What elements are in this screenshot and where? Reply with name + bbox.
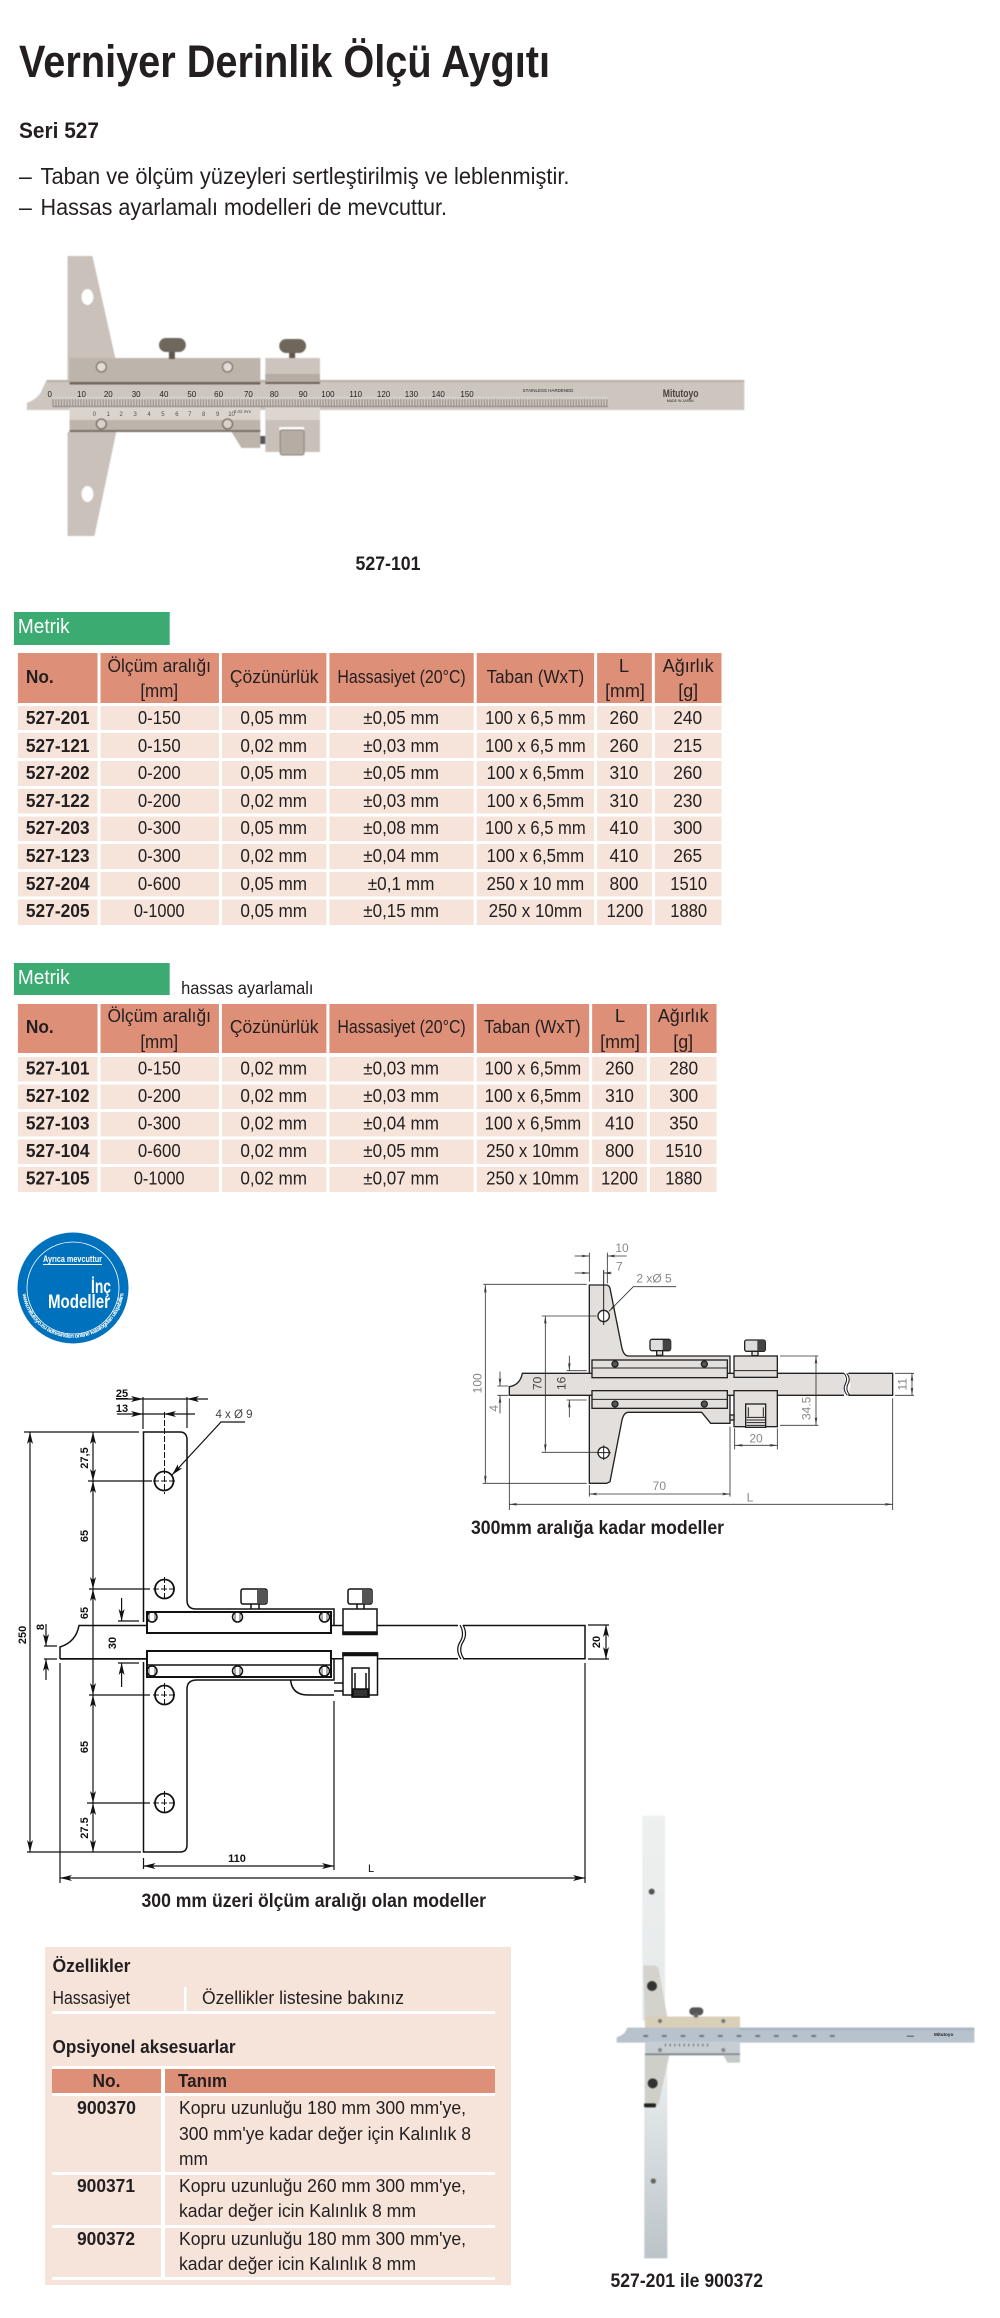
row 527-205: ±0,15 mm: [363, 900, 439, 921]
series label: Seri 527: [19, 118, 99, 143]
photo: vernier depth gauge 527-101: 20: [104, 390, 113, 399]
row 527-122: ±0,03 mm: [363, 790, 439, 811]
row 527-103: 410: [605, 1112, 634, 1134]
photo: vernier depth gauge 527-101: 6: [175, 412, 179, 418]
table background: [18, 653, 722, 925]
table header: [mm]: [600, 1031, 640, 1052]
dimension labels: 70: [531, 1376, 545, 1390]
row 527-102: 0-200: [138, 1085, 181, 1106]
row 527-203: ±0,08 mm: [363, 817, 439, 838]
section tag: Metrik, fine adjustment: Metrik: [18, 967, 70, 989]
photo: vernier depth gauge 527-101: 50: [187, 390, 197, 399]
photo: 527-201 with extension 900372: Mitutoyo: [934, 2032, 953, 2037]
table header: Ölçüm aralığı: [107, 1005, 211, 1026]
row 527-204: 0-600: [138, 873, 181, 894]
row 527-105: 1200: [601, 1167, 638, 1189]
photo: vernier depth gauge 527-101: 140: [432, 390, 445, 399]
row 527-205: 1880: [670, 900, 707, 921]
row 527-202: [26, 762, 702, 783]
row 527-201: 0-150: [138, 707, 181, 728]
photo: vernier depth gauge 527-101: Mitutoyo: [663, 388, 699, 400]
table header: [mm]: [140, 1031, 178, 1052]
row 527-104: ±0,05 mm: [363, 1140, 439, 1161]
dimension labels: L: [747, 1491, 754, 1505]
row 527-103: 527-103: [26, 1112, 90, 1134]
photo: vernier depth gauge 527-101: 30: [132, 390, 141, 399]
row 900372: Kopru uzunluğu 180 mm 300 mm'ye,: [179, 2229, 466, 2249]
row 527-201: 527-201: [26, 707, 90, 728]
section tag: Metrik: [14, 612, 170, 645]
row 527-102: 527-102: [26, 1085, 90, 1106]
row 527-104: 1510: [665, 1140, 702, 1161]
row 900370: mm: [179, 2149, 208, 2169]
row 527-202: 0,05 mm: [240, 762, 307, 783]
row 527-104: 0-600: [138, 1140, 181, 1161]
row 527-103: [26, 1112, 698, 1134]
row 527-121: 215: [673, 735, 702, 756]
dimension labels: 4: [487, 1405, 501, 1412]
photo: vernier depth gauge 527-101: 90: [299, 390, 308, 399]
badge: inch models available: [18, 1232, 128, 1344]
section tag: Metrik, fine adjustment: [14, 963, 313, 998]
row 527-122: 0-200: [138, 790, 181, 811]
row 527-203: 0-300: [138, 817, 181, 838]
row 527-101: ±0,03 mm: [363, 1057, 439, 1079]
photo: vernier depth gauge 527-101: 10: [228, 412, 236, 418]
row 527-105: 1880: [665, 1167, 702, 1189]
title: Verniyer Derinlik Ölçü Aygıtı: [19, 36, 550, 87]
row 527-203: 100 x 6,5 mm: [485, 817, 586, 838]
row 527-105: 527-105: [26, 1167, 90, 1189]
row 527-104: 800: [605, 1140, 634, 1161]
row 527-204: 1510: [670, 873, 707, 894]
row 527-103: 100 x 6,5mm: [485, 1112, 581, 1134]
photo caption: 527-201 ile 900372: [610, 2270, 763, 2292]
table header: [g]: [678, 680, 698, 701]
dimension labels: 65: [79, 1607, 91, 1619]
row 527-121: 527-121: [26, 735, 90, 756]
row 527-202: ±0,05 mm: [363, 762, 439, 783]
row 527-105: 0,02 mm: [240, 1167, 307, 1189]
row 527-122: 527-122: [26, 790, 90, 811]
photo: vernier depth gauge 527-101: STAINLESS HARDENED: [523, 388, 574, 393]
row 527-121: 260: [610, 735, 638, 756]
dimension labels: 10: [615, 1241, 629, 1255]
photo: vernier depth gauge 527-101: 60: [214, 390, 224, 399]
row 527-201: 100 x 6,5 mm: [485, 707, 586, 728]
badge: inch models available: www.mitutoyo.eu adresinden online katalogdan ulaşabilirsiniz: [22, 1293, 124, 1338]
dimension labels: 65: [79, 1741, 91, 1753]
row 900371: kadar değer icin Kalınlık 8 mm: [179, 2201, 416, 2221]
gauge body: [509, 1270, 893, 1483]
photo: vernier depth gauge 527-101: 2: [120, 412, 124, 418]
row 527-202: 310: [610, 762, 638, 783]
accessories table: Tanım: [178, 2071, 227, 2091]
accessories heading: Opsiyonel aksesuarlar: [52, 2037, 236, 2057]
table header: L: [619, 655, 629, 676]
photo: vernier depth gauge 527-101: 0: [47, 390, 52, 399]
photo: vernier depth gauge 527-101: 130: [405, 390, 419, 399]
row 527-104: 250 x 10mm: [486, 1140, 579, 1161]
dimension labels: [17, 1388, 603, 1875]
dimension labels: 30: [107, 1637, 119, 1649]
table header: [26, 1005, 709, 1052]
table header: Ağırlık: [663, 655, 714, 676]
table header: [mm]: [605, 680, 645, 701]
photo: vernier depth gauge 527-101: [27, 256, 744, 536]
photo: vernier depth gauge 527-101: MADE IN JAPAN: [667, 398, 694, 403]
dimension labels: 250: [17, 1626, 29, 1644]
row 527-104: 0,02 mm: [240, 1140, 307, 1161]
photo: 527-201 with extension 900372: [617, 1816, 974, 2258]
row 527-123: 410: [610, 845, 638, 866]
row 900371: [77, 2176, 466, 2221]
photo: vernier depth gauge 527-101: 10: [77, 390, 86, 399]
technical drawing: models up to 300 mm: [470, 1241, 914, 1510]
row 900371: 900371: [77, 2176, 135, 2196]
row 527-101: 0-150: [138, 1057, 181, 1079]
row 527-201: 240: [673, 707, 702, 728]
row 900370: 300 mm'ye kadar değer için Kalınlık 8: [179, 2124, 471, 2144]
row 527-202: 100 x 6,5mm: [487, 762, 584, 783]
row 900370: [77, 2098, 471, 2169]
row 527-203: [26, 817, 702, 838]
dimension labels: 11: [896, 1378, 910, 1391]
row 527-101: 260: [605, 1057, 634, 1079]
dimension labels: 25: [116, 1388, 128, 1400]
row 900372: [77, 2229, 466, 2274]
section tag: Metrik: Metrik: [18, 616, 70, 638]
row 527-102: [26, 1085, 698, 1106]
row 527-201: 0,05 mm: [240, 707, 307, 728]
row 527-123: 527-123: [26, 845, 90, 866]
row 527-122: 230: [673, 790, 702, 811]
table header: Taban (WxT): [487, 666, 584, 687]
row 527-122: 310: [610, 790, 638, 811]
table header: Taban (WxT): [484, 1016, 581, 1037]
row 527-103: 0,02 mm: [240, 1112, 307, 1134]
table header: No.: [26, 666, 54, 687]
row 527-105: 0-1000: [134, 1167, 185, 1189]
table header: [mm]: [140, 680, 178, 701]
row 527-102: 0,02 mm: [240, 1085, 307, 1106]
table header: Hassasiyet (20°C): [337, 1016, 466, 1037]
row 527-202: 527-202: [26, 762, 90, 783]
row 900371: Kopru uzunluğu 260 mm 300 mm'ye,: [179, 2176, 466, 2196]
row 527-104: 527-104: [26, 1140, 90, 1161]
dimension lines: [483, 1253, 914, 1510]
row 527-105: 250 x 10mm: [486, 1167, 579, 1189]
accessories table: [52, 2066, 495, 2280]
table header: Çözünürlük: [230, 1016, 319, 1037]
table header: [26, 655, 714, 701]
row 527-204: 0,05 mm: [240, 873, 307, 894]
table: fine-adjustment models: [18, 1004, 717, 1192]
row 527-121: 0,02 mm: [240, 735, 307, 756]
row 527-101: [26, 1057, 698, 1079]
row 527-203: 300: [673, 817, 702, 838]
panel: specifications and optional accessories: [45, 1947, 511, 2285]
photo: vernier depth gauge 527-101: 70: [244, 390, 253, 399]
photo: vernier depth gauge 527-101: 120: [377, 390, 391, 399]
badge: inch models available: Ayrıca mevcuttur: [43, 1254, 102, 1264]
row 527-123: 0,02 mm: [240, 845, 307, 866]
row 527-101: 280: [669, 1057, 698, 1079]
photo: vernier depth gauge 527-101: 8: [202, 412, 206, 418]
table header: Ağırlık: [658, 1005, 709, 1026]
dimension labels: 8: [35, 1624, 47, 1630]
row 527-101: 527-101: [26, 1057, 90, 1079]
row 527-205: 1200: [607, 900, 643, 921]
photo: vernier depth gauge 527-101: 110: [349, 390, 363, 399]
dimension labels: 20: [749, 1432, 763, 1446]
row 527-202: 0-200: [138, 762, 181, 783]
photo: vernier depth gauge 527-101: 80: [270, 390, 279, 399]
dimension labels: 34.5: [800, 1396, 814, 1420]
accuracy row: Hassasiyet: [52, 1988, 130, 2008]
badge: inch models available: Modeller: [48, 1292, 110, 1313]
row 527-103: ±0,04 mm: [363, 1112, 439, 1134]
accuracy row: [52, 1987, 495, 2014]
row 527-205: 527-205: [26, 900, 90, 921]
dimension labels: 100: [470, 1373, 484, 1393]
row 900372: 900372: [77, 2229, 135, 2249]
row 527-121: [26, 735, 702, 756]
row 527-123: ±0,04 mm: [363, 845, 439, 866]
row 527-122: [26, 790, 702, 811]
feature list: –: [19, 163, 32, 189]
dimension labels: L: [368, 1863, 374, 1875]
photo caption: 527-101: [356, 554, 421, 575]
dimension labels: 27.5: [79, 1817, 91, 1839]
row 527-101: 0,02 mm: [240, 1057, 307, 1079]
feature list: [19, 163, 570, 220]
row 527-122: 0,02 mm: [240, 790, 307, 811]
photo: vernier depth gauge 527-101: 100: [321, 390, 335, 399]
row 527-102: 100 x 6,5mm: [485, 1085, 581, 1106]
row 900370: Kopru uzunluğu 180 mm 300 mm'ye,: [179, 2098, 466, 2118]
feature list: –: [19, 194, 32, 220]
row 527-102: 300: [669, 1085, 698, 1106]
row 527-101: 100 x 6,5mm: [485, 1057, 581, 1079]
accessories table: No.: [92, 2071, 120, 2091]
badge: inch models available: İnç: [91, 1277, 111, 1298]
row 527-121: 100 x 6,5 mm: [485, 735, 586, 756]
dimension labels: [470, 1241, 910, 1505]
dimension lines: [24, 1397, 609, 1883]
row 527-204: 527-204: [26, 873, 90, 894]
photo: vernier depth gauge 527-101: 7: [188, 412, 192, 418]
photo: vernier depth gauge 527-101: 3: [133, 412, 137, 418]
specifications heading: Özellikler: [52, 1956, 130, 1976]
table header: Çözünürlük: [230, 666, 319, 687]
table header: [g]: [673, 1031, 693, 1052]
row 527-204: ±0,1 mm: [368, 873, 434, 894]
technical drawing: models over 300 mm: [17, 1388, 609, 1883]
row 527-204: 250 x 10 mm: [487, 873, 584, 894]
row 527-122: 100 x 6,5mm: [487, 790, 584, 811]
photo: vernier depth gauge 527-101: 150: [460, 390, 474, 399]
row 527-203: 410: [610, 817, 638, 838]
row 527-123: 100 x 6,5mm: [487, 845, 584, 866]
dimension labels: 70: [653, 1479, 666, 1493]
row 527-104: [26, 1140, 702, 1161]
dimension labels: 7: [616, 1260, 623, 1274]
photo: vernier depth gauge 527-101: 1: [107, 412, 111, 418]
photo: vernier depth gauge 527-101: 9: [216, 412, 220, 418]
row 527-201: [26, 707, 702, 728]
table background: [18, 1004, 717, 1192]
section tag: Metrik, fine adjustment: hassas ayarlamalı: [181, 978, 313, 998]
row 527-105: [26, 1167, 702, 1189]
dimension labels: 2 xØ 5: [636, 1272, 672, 1286]
row 527-201: ±0,05 mm: [363, 707, 439, 728]
row 527-102: ±0,03 mm: [363, 1085, 439, 1106]
dimension labels: 4 x Ø 9: [215, 1409, 253, 1421]
row 527-105: ±0,07 mm: [363, 1167, 439, 1189]
row 900370: 900370: [77, 2098, 136, 2118]
feature list: Taban ve ölçüm yüzeyleri sertleştirilmiş ve leblenmiştir.: [40, 163, 570, 189]
row 527-102: 310: [605, 1085, 634, 1106]
feature list: Hassas ayarlamalı modelleri de mevcuttur.: [40, 194, 447, 220]
row 527-121: ±0,03 mm: [363, 735, 439, 756]
row 527-205: [26, 900, 707, 921]
photo: vernier depth gauge 527-101: 40: [160, 390, 169, 399]
photo: vernier depth gauge 527-101: 0.02 mm: [234, 409, 251, 414]
row 527-103: 350: [669, 1112, 698, 1134]
table header: Ölçüm aralığı: [107, 655, 211, 676]
row 527-123: 0-300: [138, 845, 181, 866]
row 527-204: [26, 873, 707, 894]
dimension labels: 110: [228, 1853, 246, 1865]
drawing caption: up to 300 mm: 300mm aralığa kadar modeller: [471, 1517, 724, 1539]
row 527-121: 0-150: [138, 735, 181, 756]
table header: No.: [26, 1016, 54, 1037]
row 527-205: 0,05 mm: [240, 900, 307, 921]
dimension labels: 13: [116, 1403, 128, 1415]
row 527-205: 0-1000: [134, 900, 185, 921]
row 527-123: [26, 845, 702, 866]
row 527-123: 265: [673, 845, 702, 866]
drawing caption: over 300 mm: 300 mm üzeri ölçüm aralığı olan modeller: [142, 1890, 486, 1912]
accuracy row: Özellikler listesine bakınız: [202, 1988, 404, 2008]
photo: vernier depth gauge 527-101: 5: [161, 412, 165, 418]
row 527-202: 260: [673, 762, 702, 783]
row 527-205: 250 x 10mm: [489, 900, 582, 921]
table header: Hassasiyet (20°C): [337, 666, 466, 687]
row 527-204: 800: [610, 873, 638, 894]
table header: L: [615, 1005, 625, 1026]
row 527-203: 0,05 mm: [240, 817, 307, 838]
dimension labels: 27,5: [79, 1447, 91, 1469]
dimension labels: 20: [591, 1636, 603, 1648]
dimension labels: 16: [554, 1376, 568, 1390]
photo: vernier depth gauge 527-101: 4: [147, 412, 151, 418]
row 527-203: 527-203: [26, 817, 90, 838]
gauge outline: [60, 1412, 585, 1852]
photo: vernier depth gauge 527-101: 0: [93, 412, 97, 418]
table: metric models: [18, 653, 722, 925]
dimension labels: 65: [79, 1530, 91, 1542]
row 900372: kadar değer icin Kalınlık 8 mm: [179, 2254, 416, 2274]
row 527-201: 260: [610, 707, 638, 728]
row 527-103: 0-300: [138, 1112, 181, 1134]
